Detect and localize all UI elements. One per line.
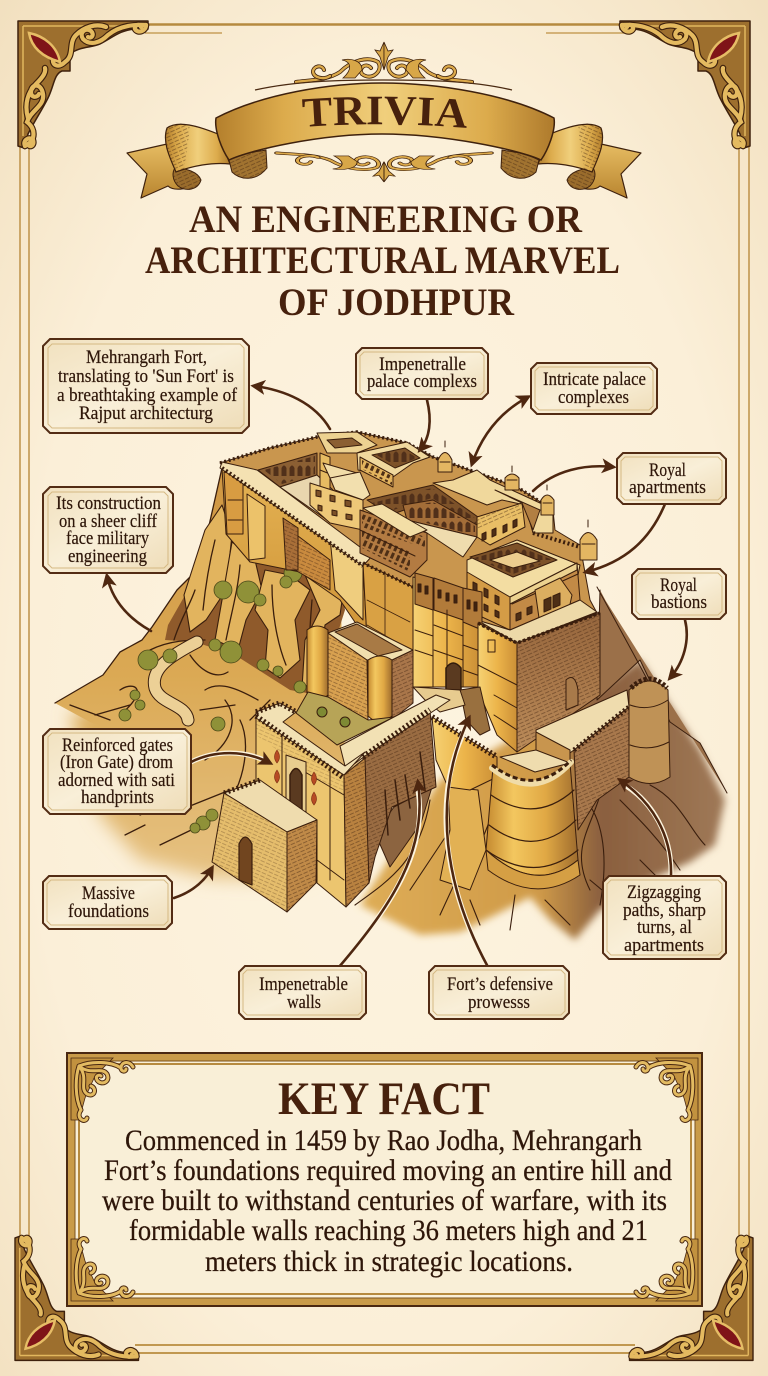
projecting balcony	[535, 578, 572, 625]
panel heading: KEY FACT	[278, 1073, 490, 1125]
crevice lines	[70, 540, 312, 845]
corner ornament: top left	[18, 21, 148, 148]
arrow: royal apartments to tower	[586, 504, 665, 572]
callout: reinforced gates: Reinforced gates	[62, 736, 173, 756]
callout: royal bastions: Royal	[660, 576, 697, 596]
arrow: royal apartments	[533, 466, 613, 491]
callout: Mehrangarh Fort: translating to 'Sun Fort' is	[58, 367, 234, 387]
sati handprints	[274, 750, 316, 805]
golden crags by bastion	[440, 787, 486, 890]
east curtain wall	[574, 707, 629, 830]
panel body text: Commenced in 1459 by Rao Jodha, Mehrangarh	[125, 1124, 642, 1157]
callout: royal apartments: Royal	[649, 461, 686, 481]
callout: royal apartments	[617, 453, 726, 504]
rocky stair below gate	[460, 687, 490, 735]
window block	[360, 457, 393, 487]
front gatehouse left face	[212, 793, 287, 912]
callout: zigzagging paths: paths, sharp	[623, 901, 706, 921]
panel body text: were built to withstand centuries of warfare, with its	[102, 1184, 667, 1217]
callout: impenetrable walls: Impenetrable	[259, 975, 348, 995]
bushes	[119, 564, 347, 833]
rampart walkway to gate	[340, 695, 450, 770]
central courtyard floor	[407, 520, 477, 557]
callout: Mehrangarh Fort	[43, 339, 249, 433]
callout: cliff face	[43, 487, 173, 573]
palace right face	[510, 563, 580, 630]
grassy terrace	[296, 692, 394, 745]
callout: intricate palace: Intricate palace	[543, 370, 646, 390]
front gatehouse right face	[287, 820, 317, 912]
arrow: defensive prowess	[446, 718, 488, 967]
panel body text	[102, 1124, 672, 1278]
callout: cliff face: on a sheer cliff	[59, 512, 158, 532]
ribbon left tail	[127, 108, 267, 198]
callout: defensive prowess: Fort’s defensive	[447, 975, 553, 995]
callout: Mehrangarh Fort: Rajput architecturg	[79, 404, 213, 424]
panel corner ornaments	[71, 1058, 698, 1301]
callout: intricate palace: complexes	[558, 388, 629, 408]
flourish above ribbon	[296, 42, 472, 82]
callout arrows	[107, 386, 687, 967]
ribbon label	[303, 124, 467, 128]
callout: impenetrable palace	[356, 348, 488, 399]
panel: key fact	[67, 1053, 702, 1306]
roof terrace of big block	[477, 600, 597, 643]
ribbon right tail	[501, 108, 641, 198]
callout: reinforced gates: (Iron Gate) drom	[60, 753, 174, 773]
rear tall block	[317, 432, 377, 453]
callout: zigzagging paths: apartments	[624, 936, 704, 956]
rear east parapet	[533, 533, 580, 547]
callout: reinforced gates: adorned with sati	[58, 771, 175, 791]
tower one	[224, 472, 243, 534]
callout: zigzagging paths: turns, al	[637, 918, 692, 938]
callout: Mehrangarh Fort: Mehrangarh Fort,	[86, 348, 207, 368]
light wall panel	[330, 537, 363, 620]
corner ornament: bottom right	[629, 1236, 753, 1360]
plateau base of palace	[220, 432, 597, 643]
yellow wall behind bastion	[432, 717, 497, 790]
callout: impenetrable walls: walls	[287, 993, 321, 1013]
domed turrets	[438, 441, 597, 560]
front-right palace roof	[467, 540, 580, 600]
brown crags by curtain wall	[375, 787, 432, 867]
callout: Mehrangarh Fort: a breathtaking example of	[57, 386, 238, 406]
courtyard fortress left wall	[328, 633, 368, 720]
callout: impenetrable palace: palace complexs	[367, 372, 477, 392]
arrow: intricate palace	[472, 397, 528, 464]
callout: impenetrable walls	[239, 966, 366, 1019]
rock pillars	[184, 505, 345, 688]
arrow: cliff face	[107, 576, 151, 631]
callout: reinforced gates	[43, 729, 191, 814]
callout: impenetrable palace: Impenetralle	[379, 355, 466, 375]
arrow: impenetrable palace	[420, 400, 430, 450]
soft lower hill	[70, 680, 400, 880]
courtyard fortress top	[328, 622, 413, 660]
callout: royal bastions: bastions	[651, 593, 707, 613]
callout: reinforced gates: handprints	[81, 788, 154, 808]
soft lower rock	[360, 660, 725, 940]
east wall walkway	[536, 690, 629, 760]
callout: zigzagging paths	[603, 876, 726, 959]
town block roof	[330, 472, 370, 500]
left court floor	[280, 475, 333, 522]
corner ornament: bottom left	[15, 1236, 139, 1360]
dark curtain wall	[363, 710, 436, 883]
callout: defensive prowess	[429, 966, 569, 1019]
winding road	[154, 642, 197, 720]
flourish below ribbon	[277, 153, 491, 182]
arrow: Mehrangarh label	[254, 386, 330, 429]
terrace block	[323, 463, 357, 483]
small guard building	[536, 732, 570, 765]
big block left face	[478, 623, 517, 752]
callout: massive foundations	[43, 876, 172, 929]
rear palace wing	[357, 442, 430, 477]
gate arch	[446, 663, 461, 690]
central courtyard arcade	[403, 500, 477, 537]
central gate tower	[413, 577, 480, 687]
palace left face	[467, 572, 510, 630]
callout: royal apartments: apartments	[629, 478, 706, 498]
front gatehouse door	[239, 837, 252, 885]
panel body text: Fort’s foundations required moving an entire hill and	[104, 1154, 672, 1187]
hill upper slope	[55, 468, 345, 780]
fort illustration	[55, 432, 727, 940]
front gatehouse top	[224, 780, 317, 832]
rear battlements	[220, 432, 553, 510]
left courtyard arcade	[258, 453, 317, 487]
callout: zigzagging paths: Zigzagging	[627, 883, 701, 903]
great round bastion	[486, 763, 578, 875]
left curtain wall with towers	[222, 468, 367, 640]
iron gate building top	[256, 703, 365, 775]
lined mid wall	[363, 563, 413, 687]
courtyard fortress right wall	[392, 650, 413, 720]
callout: defensive prowess: prowesss	[468, 993, 530, 1013]
callout: massive foundations: Massive	[82, 884, 135, 904]
east round tower	[629, 681, 670, 784]
iron gate building right face	[344, 758, 369, 907]
callout: cliff face: face military	[66, 529, 150, 549]
big block right face	[517, 613, 600, 752]
rampart walkway	[220, 462, 372, 566]
main heading	[145, 198, 620, 324]
west gallery wing	[360, 510, 427, 577]
callout: massive foundations: foundations	[68, 902, 149, 922]
rock outline and cracks	[597, 587, 727, 793]
dark balcony band	[367, 485, 478, 527]
dark cliff face	[165, 520, 345, 695]
main heading: AN ENGINEERING OR	[189, 198, 583, 241]
iron gate doorway	[286, 755, 306, 812]
main heading: ARCHITECTURAL MARVEL	[145, 239, 620, 282]
round tower two	[368, 656, 392, 722]
iron gate building left face	[256, 713, 346, 907]
main heading: OF JODHPUR	[278, 281, 515, 324]
ribbon centre band	[216, 83, 554, 160]
east yellow block	[477, 503, 525, 545]
gate tower head	[415, 573, 482, 630]
yellow town block	[310, 483, 363, 530]
callout: cliff face: Its construction	[56, 494, 161, 514]
callout: cliff face: engineering	[68, 547, 147, 567]
rear right roof band	[433, 470, 553, 533]
callout: intricate palace	[531, 363, 657, 414]
arrow: zigzagging paths	[620, 780, 671, 875]
arrow: reinforced gates	[191, 753, 270, 763]
title ribbon banner	[126, 42, 642, 199]
arrow: royal bastions	[670, 620, 687, 678]
tall column	[320, 453, 330, 522]
corner ornament: top right	[620, 21, 750, 148]
tower two	[247, 494, 265, 560]
arrow: impenetrable walls	[339, 782, 420, 967]
panel body text: meters thick in strategic locations.	[205, 1245, 573, 1278]
round tower one	[307, 626, 328, 700]
inner arcade of front palace	[470, 543, 557, 577]
callout: royal bastions	[632, 569, 726, 619]
panel body text: formidable walls reaching 36 meters high and 21	[129, 1214, 648, 1247]
tower three	[283, 518, 298, 570]
title ribbon banner: TRIVIA	[302, 96, 467, 128]
arrow: massive foundations	[174, 868, 212, 898]
